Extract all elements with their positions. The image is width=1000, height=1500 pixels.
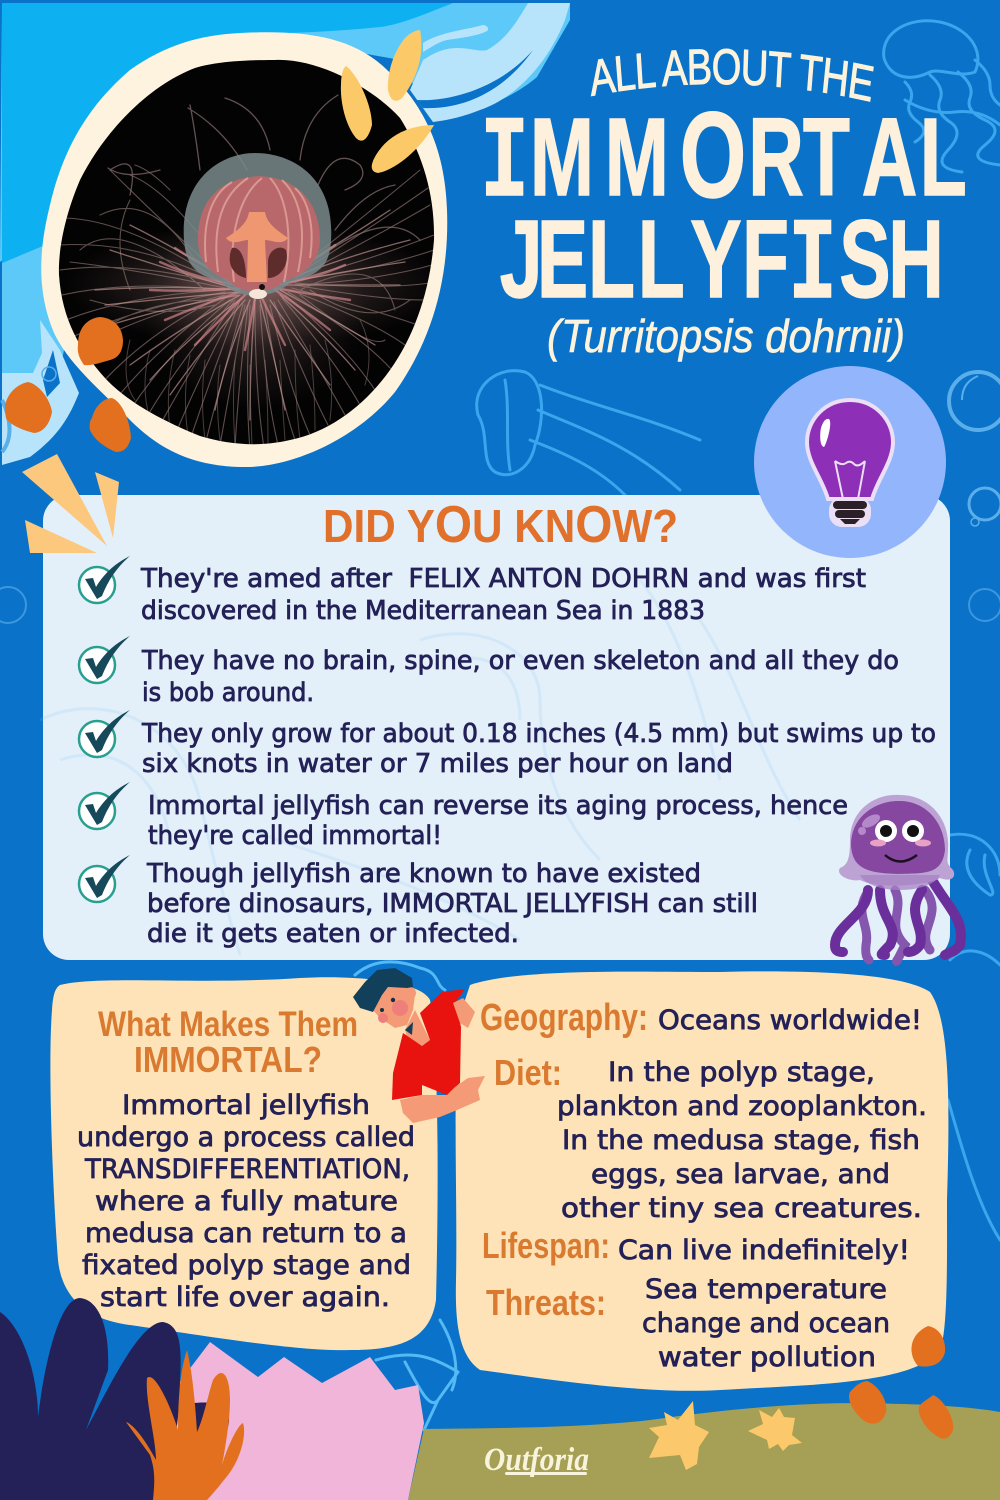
fact: lifespan — [482, 1225, 910, 1266]
background: lower jellyfish outline — [355, 962, 458, 1430]
fact: diet: other tiny sea creatures. — [561, 1193, 922, 1224]
fact: diet: In the medusa stage, fish — [562, 1125, 920, 1156]
fact: lifespan: Can live indefinitely! — [618, 1235, 910, 1266]
title line: immortal: A — [862, 97, 917, 219]
title line: immortal: T — [803, 97, 850, 219]
fact 2: is bob around. — [142, 678, 314, 708]
title line: immortal: O — [680, 88, 746, 224]
fact 2: They have no brain, spine, or even skeleton and all they do — [141, 646, 899, 676]
frame decoration: yellow leaves — [341, 30, 434, 173]
text: transdifferentiation explanation: undergo a process called — [77, 1122, 415, 1153]
text: transdifferentiation explanation: medusa can return to a — [85, 1218, 407, 1249]
decorative peach spikes — [22, 454, 119, 553]
title line: immortal — [480, 88, 967, 231]
fact: threats — [486, 1274, 890, 1373]
stars — [649, 1401, 802, 1470]
fact: threats: water pollution — [658, 1342, 876, 1373]
heading: what makes them immortal — [98, 1005, 358, 1080]
title line: immortal: L — [920, 97, 967, 219]
tentacle glow — [94, 238, 417, 336]
heading: what makes them immortal: What Makes Them — [98, 1005, 358, 1044]
fact 5: before dinosaurs, IMMORTAL JELLYFISH can still — [147, 889, 758, 919]
title line: jellyfish: S — [839, 199, 891, 321]
title line: jellyfish: H — [888, 199, 944, 321]
fact 2 — [79, 636, 899, 708]
panel: did you know — [40, 495, 950, 960]
text: transdifferentiation explanation: where a fully mature — [95, 1186, 398, 1217]
subtitle: scientific name: (Turritopsis dohrnii) — [547, 310, 905, 362]
text: transdifferentiation explanation: Immortal jellyfish — [122, 1090, 370, 1121]
fact 3: six knots in water or 7 miles per hour on land — [142, 749, 733, 779]
fact 1 — [79, 556, 866, 626]
title line: jellyfish: L — [638, 199, 685, 321]
plant: orange — [126, 1350, 244, 1500]
fact 3: They only grow for about 0.18 inches (4.5 mm) but swims up to — [141, 719, 936, 749]
photo: immortal jellyfish in cream frame — [40, 32, 460, 467]
fact 5: Though jellyfish are known to have existed — [146, 859, 701, 889]
text: transdifferentiation explanation — [77, 1090, 415, 1313]
background: bubbles right — [0, 372, 1000, 623]
fact: geography — [480, 997, 922, 1039]
fact 1: discovered in the Mediterranean Sea in 1883 — [141, 596, 705, 626]
title line: jellyfish: I — [788, 202, 837, 333]
fact: diet: In the polyp stage, — [608, 1057, 875, 1088]
fact: diet: eggs, sea larvae, and — [591, 1159, 890, 1190]
ground — [408, 1403, 1000, 1500]
title line: immortal: R — [748, 97, 804, 219]
title line: jellyfish: F — [742, 199, 789, 321]
fact: diet: plankton and zooplankton. — [557, 1091, 927, 1122]
plant: navy leaves — [0, 1298, 229, 1500]
heading: did you know: DID YOU KNOW? — [323, 496, 678, 554]
fact: diet: Diet: — [494, 1052, 562, 1093]
text: transdifferentiation explanation: start life over again. — [100, 1282, 390, 1313]
character: man pointing — [353, 968, 485, 1123]
title line: jellyfish: L — [588, 199, 635, 321]
fact 5 — [79, 855, 758, 949]
title line: jellyfish: J — [500, 199, 543, 321]
fact 1: They're amed after FELIX ANTON DOHRN and was first — [140, 564, 866, 594]
logo: outforia: Outforia — [484, 1442, 589, 1478]
tentacles — [60, 95, 434, 450]
frame decoration: orange blobs — [5, 317, 131, 452]
fact: diet — [494, 1052, 927, 1224]
panel: facts — [456, 971, 948, 1391]
fact 5: die it gets eaten or infected. — [147, 919, 519, 949]
fact: threats: Threats: — [486, 1282, 606, 1323]
background: centre jellyfish outline — [477, 371, 700, 495]
title line: jellyfish: E — [537, 199, 588, 321]
heading: what makes them immortal: IMMORTAL? — [134, 1039, 322, 1080]
title line: all about the: ALL ABOUT THE — [590, 48, 874, 102]
text: transdifferentiation explanation: TRANSDIFFERENTIATION, — [84, 1154, 410, 1185]
jellyfish bell — [184, 153, 331, 296]
title line: jellyfish: Y — [690, 199, 742, 321]
fact: threats: Sea temperature — [645, 1274, 887, 1305]
icon: light bulb — [754, 366, 946, 558]
fact 4: they're called immortal! — [148, 821, 442, 851]
fact 4 — [79, 782, 848, 851]
title — [480, 48, 967, 362]
title line: immortal: I — [480, 100, 529, 231]
mascot: purple jellyfish — [835, 795, 961, 961]
orange pebbles — [849, 1326, 953, 1439]
title line: jellyfish — [500, 199, 944, 333]
coral: pink — [120, 1342, 424, 1500]
title line: immortal: M — [530, 97, 594, 219]
title line: immortal: M — [605, 97, 669, 219]
fact: lifespan: Lifespan: — [482, 1225, 610, 1266]
background: mid-right jellyfish outline — [948, 834, 1000, 1240]
fact: geography: Oceans worldwide! — [658, 1005, 922, 1036]
text: transdifferentiation explanation: fixated polyp stage and — [82, 1250, 411, 1281]
background: top-left light water shape — [0, 3, 570, 465]
fact 4: Immortal jellyfish can reverse its aging process, hence — [148, 791, 848, 821]
fact 3 — [79, 710, 936, 779]
background: top right jellyfish outline — [884, 21, 1000, 172]
fact: threats: change and ocean — [642, 1308, 890, 1339]
fact: geography: Geography: — [480, 997, 648, 1039]
panel: what makes them immortal — [50, 977, 438, 1350]
